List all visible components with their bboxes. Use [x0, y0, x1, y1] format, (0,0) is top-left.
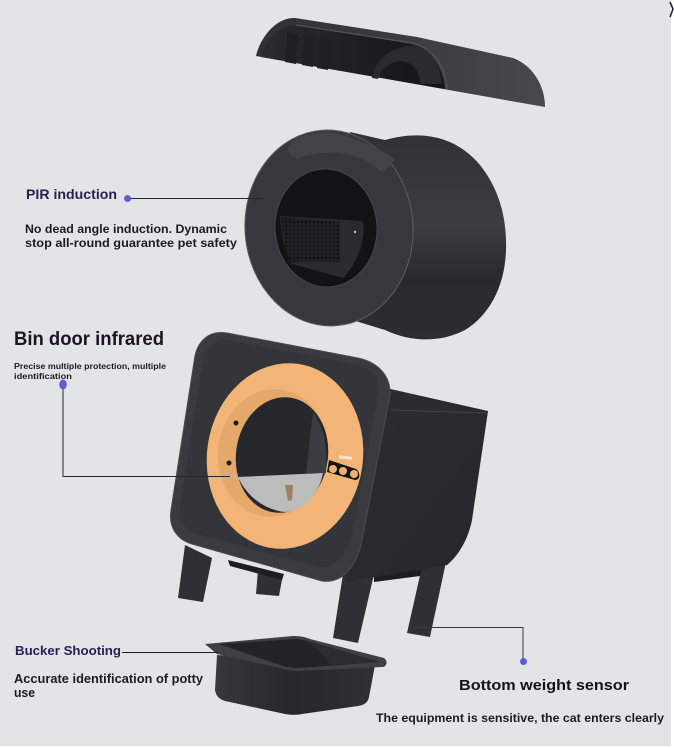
text: bin door description: Precise multiple protection, multiple	[14, 362, 167, 371]
litter tray	[122, 636, 387, 715]
text: bucket description	[14, 672, 203, 700]
sensor strip	[327, 455, 359, 480]
text: sensor description: The equipment is sensitive, the cat enters clearly	[376, 711, 664, 725]
drum front face	[238, 124, 420, 332]
ring opening	[228, 391, 336, 519]
drum rear body	[320, 132, 506, 339]
body underside mechanism	[228, 560, 424, 582]
ring screw holes	[226, 420, 238, 466]
body legs	[178, 545, 212, 602]
heading: Bucker Shooting: Bucker Shooting	[15, 643, 121, 658]
main body	[59, 333, 527, 665]
ring inner step	[210, 382, 336, 524]
heading: Bottom weight sensor: Bottom weight sensor	[459, 677, 629, 694]
body side	[345, 388, 488, 582]
text: PIR description: No dead angle induction. Dynamic	[25, 222, 227, 236]
ring leader line	[63, 386, 230, 476]
drum top notch	[288, 132, 395, 173]
drum	[124, 124, 506, 339]
drum inner mesh	[280, 216, 364, 278]
drum leader dot	[124, 195, 131, 202]
top lid	[256, 18, 545, 107]
drum opening	[271, 166, 381, 290]
drum leader line	[128, 198, 263, 200]
tray leader line	[122, 652, 218, 654]
text: bucket description: use	[14, 686, 35, 700]
text: PIR description: stop all-round guarantee pet safety	[25, 236, 237, 250]
ring leader dot	[59, 380, 67, 390]
foot leader dot	[520, 658, 527, 665]
text: bin door description	[14, 362, 167, 381]
text: PIR description	[25, 222, 237, 250]
close icon	[670, 2, 673, 17]
body front frame	[170, 333, 390, 581]
text: bucket description: Accurate identification of potty	[14, 672, 203, 686]
foot leader line	[415, 628, 523, 660]
body front inner panel	[180, 340, 379, 567]
heading: Bin door infrared: Bin door infrared	[14, 329, 164, 350]
heading: PIR induction: PIR induction	[26, 186, 117, 202]
text: bin door description: identification	[14, 372, 72, 381]
orange ring	[195, 353, 375, 559]
